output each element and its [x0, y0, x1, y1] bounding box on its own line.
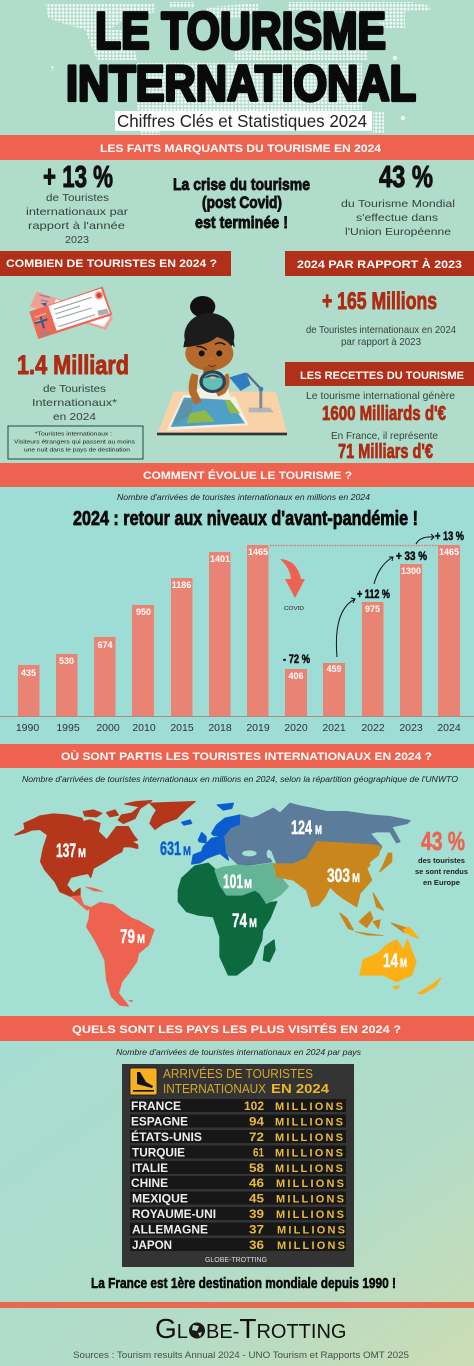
logo: globe-trotting: TROTTING [239, 1313, 346, 1344]
bar chart: 435 [21, 668, 36, 678]
stat: 43 % [341, 159, 455, 238]
stat: 43 %: 43 % [379, 159, 433, 194]
stat: +13 %: + 13 % [43, 159, 113, 194]
banner: 2024 par rapport à 2023: 2024 PAR RAPPORT À 2023 [297, 258, 462, 271]
map values: M [400, 956, 407, 970]
callout: crise terminée: est terminée ! [195, 213, 288, 232]
map values: 137 [56, 841, 76, 862]
stat: +165 millions [306, 288, 456, 348]
stat: +13 % [26, 159, 129, 246]
banner: pays les plus visités [0, 1016, 474, 1041]
map values: 124 [291, 818, 312, 839]
logo: globe-trotting: L [177, 1321, 188, 1343]
banner: recettes du tourisme [285, 362, 474, 386]
growth labels and arrows: + 33 % [396, 549, 427, 563]
arrivals board: ÉTATS-UNIS [131, 1131, 202, 1144]
stats: recettes [306, 390, 455, 463]
arrivals board: ITALIE [132, 1163, 168, 1175]
title [66, 2, 416, 112]
banner: recettes du tourisme: LES RECETTES DU TOURISME [300, 370, 464, 382]
arrivals board: 94 [249, 1114, 264, 1128]
sources: Sources : Tourism results Annual 2024 - UNO Tourism et Rapports OMT 2025 [73, 1350, 409, 1361]
stat: 1.4 milliard: en 2024 [53, 411, 96, 423]
arrivals board: MILLIONS [276, 1194, 344, 1206]
bar chart: 1186 [172, 580, 191, 590]
banner: comment évolue le tourisme [0, 463, 474, 487]
arrivals board: JAPON [132, 1240, 172, 1252]
arrivals board: 46 [249, 1176, 264, 1190]
bar chart: 2019 [246, 722, 270, 734]
bar chart: 674 [97, 640, 113, 650]
stat: 43 %: l'Union Européenne [345, 226, 451, 238]
icon: plane tickets [29, 287, 113, 339]
map values: M [249, 916, 257, 930]
stat: 1.4 milliard: Internationaux* [32, 397, 117, 409]
arrivals board: 45 [249, 1192, 264, 1206]
bar chart: 1995 [56, 722, 80, 734]
arrivals board: FRANCE [131, 1101, 181, 1113]
arrivals board: MILLIONS [275, 1148, 343, 1160]
chart subtitle: Nombre d'arrivées de touristes internationaux en millions en 2024 [117, 493, 371, 502]
bar chart: 2021 [322, 722, 346, 734]
arrivals board: MILLIONS [275, 1163, 343, 1175]
region: south america [72, 887, 154, 1006]
growth labels and arrows: + 13 % [435, 529, 464, 543]
dotted world map background [45, 2, 430, 135]
arrivals board: MEXIQUE [132, 1194, 188, 1206]
arrivals board: MILLIONS [277, 1240, 345, 1252]
stat: 43 %: s'effectue dans [356, 212, 438, 224]
bar chart: 406 [288, 671, 304, 681]
arrow: covid drop: COVID [284, 606, 304, 612]
arrivals board: MILLIONS [276, 1209, 344, 1221]
map subtitle: Nombre d'arrivées de touristes internationaux en millions en 2024, selon la répartition géographique de l'UNWTO [22, 775, 458, 784]
callout: 43 % en europe: en Europe [423, 878, 460, 887]
map values: 631 [160, 839, 181, 860]
map values: M [183, 844, 191, 858]
stat: +165 millions: de Touristes internationaux en 2024 [306, 324, 456, 336]
bar chart: 1465 [439, 547, 459, 557]
arrivals board: CHINE [131, 1178, 168, 1190]
stat: +13 %: internationaux par [26, 206, 129, 218]
banner: combien de touristes: COMBIEN DE TOURISTES EN 2024 ? [6, 258, 217, 270]
logo: globe-trotting: G [155, 1313, 177, 1344]
arrivals board: MILLIONS [275, 1116, 343, 1128]
growth labels and arrows: - 72 % [283, 652, 310, 666]
map values: 303 [327, 866, 350, 887]
map values: M [315, 823, 322, 837]
arrivals board: 36 [249, 1238, 264, 1252]
bar chart: 975 [365, 604, 380, 614]
icon: woman studying a map [157, 296, 287, 435]
board heading: EN 2024 [271, 1081, 330, 1096]
bar chart: 2023 [399, 722, 423, 734]
callout: crise terminée: (post Covid) [202, 193, 282, 212]
stats: recettes: 71 Milliars d'€ [338, 441, 433, 463]
map values: 79 [120, 927, 135, 948]
region: africa [178, 863, 277, 975]
arrivals board: 58 [249, 1161, 264, 1175]
banner: faits marquants [0, 135, 474, 160]
arrivals board: 102 [244, 1099, 264, 1113]
map values: M [78, 846, 86, 860]
region: oceania [360, 927, 441, 994]
region: north america [15, 801, 195, 897]
bar chart: 2022 [361, 722, 385, 734]
bar chart: 1300 [401, 566, 421, 576]
stat: +165 millions: par rapport à 2023 [341, 336, 421, 348]
arrivals board: MILLIONS [276, 1178, 344, 1190]
stat: 43 %: du Tourisme Mondial [341, 198, 455, 210]
map values: M [352, 871, 360, 885]
bar chart [0, 545, 474, 734]
growth labels and arrows [283, 529, 464, 666]
banner: pays les plus visités: QUELS SONT LES PAYS LES PLUS VISITÉS EN 2024 ? [72, 1023, 401, 1036]
board heading [163, 1066, 330, 1096]
arrivals board [122, 1064, 354, 1267]
banner: comment évolue le tourisme: COMMENT ÉVOLUE LE TOURISME ? [143, 469, 352, 482]
bar chart: 1465 [248, 547, 268, 557]
board heading: ARRIVÉES DE TOURISTES [163, 1066, 313, 1081]
arrivals board: MILLIONS [275, 1101, 343, 1113]
stat: +13 %: de Touristes [46, 192, 109, 204]
title: INTERNATIONAL [66, 56, 416, 112]
arrivals board: MILLIONS [275, 1132, 343, 1144]
map values [56, 818, 407, 972]
banner: 2024 par rapport à 2023 [285, 251, 474, 276]
region: asia [274, 842, 410, 936]
closing statement: La France est 1ère destination mondiale depuis 1990 ! [91, 1275, 396, 1292]
map values: 101 [223, 872, 243, 893]
note: définition touristes internationaux: une nuit dans le pays de destination [24, 448, 130, 454]
stats: recettes: Le tourisme international génère [306, 390, 455, 402]
callout: 43 % en europe [415, 826, 468, 887]
stat: +13 %: 2023 [65, 234, 89, 246]
arrow: covid drop [280, 559, 305, 612]
growth labels and arrows: + 112 % [357, 587, 390, 601]
callout: 43 % en europe: se sont rendus [415, 867, 468, 876]
map values: 14 [383, 951, 398, 972]
pre-pandemic reference line [270, 544, 438, 546]
stat: 1.4 milliard: de Touristes [43, 383, 106, 395]
countries subtitle: Nombre d'arrivées de touristes internationaux en 2024 par pays [116, 1048, 361, 1057]
region: russia and central asia [225, 803, 410, 866]
arrivals board: 61 [253, 1146, 264, 1160]
callout: crise terminée: La crise du tourisme [173, 175, 310, 194]
bar chart: 1990 [16, 722, 39, 734]
subtitle: Chiffres Clés et Statistiques 2024 [117, 111, 367, 131]
arrivals board: MILLIONS [277, 1224, 345, 1236]
logo: globe-trotting: O [190, 1321, 206, 1343]
board logo: GLOBE-TROTTING [205, 1257, 267, 1264]
stats: recettes: En France, il représente [331, 430, 438, 442]
title: LE TOURISME [95, 2, 386, 60]
bar chart: 950 [136, 607, 151, 617]
arrivals board: TURQUIE [132, 1148, 185, 1160]
note: définition touristes internationaux: Visiteurs étrangers qui passent au moins [14, 440, 135, 446]
map values: M [137, 932, 145, 946]
arrivals board: 37 [249, 1222, 264, 1236]
logo: globe-trotting [155, 1313, 346, 1344]
banner: où sont partis les touristes [0, 744, 474, 768]
bar chart: 2010 [132, 722, 156, 734]
bar chart: 2015 [170, 722, 194, 734]
map values: 74 [232, 911, 247, 932]
arrivals board: 39 [249, 1207, 264, 1221]
bar chart: 459 [326, 664, 342, 674]
banner: faits marquants: LES FAITS MARQUANTS DU TOURISME EN 2024 [100, 143, 382, 155]
arrivals board: ROYAUME-UNI [132, 1209, 216, 1221]
arrivals board: 72 [249, 1130, 264, 1144]
arrivals board: ESPAGNE [131, 1116, 188, 1128]
banner: combien de touristes [0, 251, 231, 276]
map values: M [244, 877, 252, 891]
banner: où sont partis les touristes: OÙ SONT PARTIS LES TOURISTES INTERNATIONAUX EN 2024 ? [61, 750, 432, 763]
region: middle east and north africa [215, 863, 288, 903]
logo: globe-trotting: BE- [206, 1321, 239, 1343]
stat: +13 %: rapport à l'année [28, 220, 125, 232]
note: définition touristes internationaux: *Touristes internationaux : [35, 432, 112, 438]
callout: crise terminée [173, 175, 310, 232]
bar chart: 2000 [96, 722, 120, 734]
world map [15, 801, 441, 1006]
region: europe [182, 803, 241, 864]
arrivals board: ALLEMAGNE [132, 1224, 208, 1236]
icon: landing plane sign [130, 1068, 157, 1095]
callout: 43 % en europe: des touristes [418, 856, 465, 865]
board heading: INTERNATIONAUX [163, 1081, 266, 1096]
bar chart: 2020 [284, 722, 308, 734]
note: définition touristes internationaux [8, 426, 143, 459]
bar chart: 2024 [437, 722, 461, 734]
bar chart: 2018 [208, 722, 232, 734]
bar chart: 1401 [210, 554, 230, 564]
stat: 1.4 milliard [17, 350, 129, 423]
bar chart: 530 [59, 656, 74, 666]
stat: 1.4 milliard: 1.4 Milliard [17, 350, 129, 380]
